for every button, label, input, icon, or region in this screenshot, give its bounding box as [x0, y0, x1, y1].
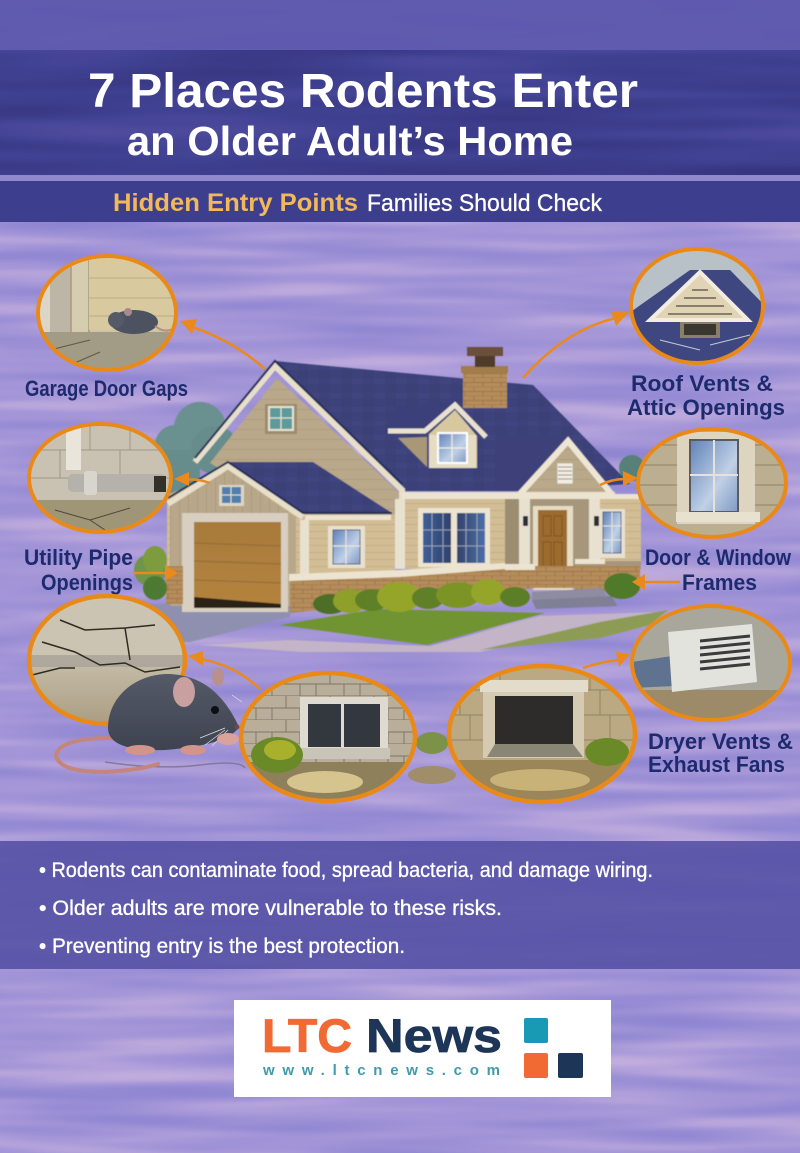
left brick base	[166, 566, 183, 604]
arrow: door label to house	[632, 574, 680, 590]
callout: door and window frames	[635, 425, 790, 540]
logo square orange	[524, 1053, 548, 1078]
dryer scene	[634, 608, 788, 718]
small window	[328, 526, 365, 568]
rat ear 2	[212, 668, 224, 686]
house illustration	[134, 347, 668, 652]
label: utility pipe openings: Utility Pipe	[24, 545, 133, 570]
bullet 1: • Rodents can contaminate food, spread bacteria, and damage wiring.	[39, 859, 653, 882]
subtitle band	[0, 175, 800, 222]
subtitle white text: Families Should Check	[367, 190, 603, 217]
callout: foundation vent opening	[445, 660, 640, 805]
arrow: to door and window	[600, 471, 638, 486]
callout: roof vents	[629, 247, 765, 365]
body left wall	[300, 520, 395, 580]
garage ring	[38, 256, 176, 370]
logo: LTC News	[234, 1000, 611, 1097]
bullet panel background	[0, 841, 800, 969]
subtitle gold text: Hidden Entry Points	[113, 189, 358, 217]
dryer ring	[632, 606, 790, 720]
callout: garage door gaps	[36, 254, 178, 372]
label: utility pipe openings	[24, 545, 133, 595]
main roof	[275, 361, 630, 491]
header panel: title	[0, 50, 800, 175]
logo wordmark News: News	[366, 1009, 502, 1062]
small rat	[108, 308, 175, 334]
window scene	[640, 431, 784, 535]
main gable wall	[210, 378, 402, 515]
roof scene	[633, 251, 761, 361]
title line 2: an Older Adult’s Home	[127, 118, 573, 164]
rat paws	[125, 733, 239, 755]
label: roof vents and attic openings: Roof Vents &	[631, 371, 773, 396]
label: door and window frames	[645, 545, 791, 595]
label: garage door gaps: Garage Door Gaps	[25, 376, 188, 401]
arrow: to utility pipe	[174, 472, 210, 486]
opening ring	[449, 666, 635, 802]
logo background	[234, 1000, 611, 1097]
callout: foundation cracks	[25, 590, 190, 730]
logo square teal	[524, 1018, 548, 1043]
gable window	[265, 404, 297, 434]
logo url: www.ltcnews.com	[262, 1062, 500, 1079]
panel: risk bullets	[0, 841, 800, 969]
callout: utility pipe openings	[25, 420, 175, 540]
main gable trim	[195, 366, 402, 501]
right lawn	[480, 610, 668, 650]
label: roof vents and attic openings	[627, 371, 785, 420]
porch area	[519, 499, 641, 569]
shrubs	[143, 546, 640, 614]
rat ground crack	[105, 762, 245, 768]
porch roof	[495, 435, 570, 491]
title banner background	[0, 50, 800, 175]
garage and lower walls	[167, 470, 640, 600]
right trim column	[300, 520, 309, 580]
subtitle background	[0, 181, 800, 222]
rat illustration	[56, 668, 245, 772]
garage gable window	[219, 485, 244, 506]
large window	[418, 508, 490, 567]
callout: dryer vents	[628, 602, 793, 724]
label: door and window frames: Frames	[682, 570, 757, 595]
right window	[600, 509, 625, 558]
label: dryer vents and exhaust fans	[648, 729, 793, 777]
rat eye	[211, 706, 219, 714]
pipe scene	[31, 426, 169, 530]
garage door	[182, 513, 288, 612]
crack ring	[29, 596, 185, 724]
basement ring	[241, 673, 415, 801]
rat nose and whiskers	[200, 695, 242, 746]
bullet 2: • Older adults are more vulnerable to these risks.	[39, 897, 502, 920]
logo square navy	[558, 1053, 583, 1078]
arrow: to foundation crack	[188, 651, 260, 689]
rat tail	[56, 738, 158, 772]
bullet 3: • Preventing entry is the best protection.	[39, 935, 405, 958]
arrow: to roof vent	[523, 311, 629, 378]
dormer	[385, 402, 486, 468]
driveway and walkways	[140, 604, 660, 652]
crack scene	[31, 598, 183, 722]
chimney	[461, 347, 508, 408]
wall lamps	[523, 516, 599, 526]
arrow: to dryer vent	[583, 652, 630, 668]
top band	[0, 0, 800, 50]
pipe ring	[29, 424, 171, 532]
logo wordmark LTC: LTC	[262, 1009, 352, 1062]
garage wall	[170, 470, 296, 606]
window ring	[638, 429, 786, 537]
opening scene	[451, 668, 633, 800]
upper body under roof	[402, 495, 640, 500]
trees behind house	[134, 402, 645, 586]
lawn	[280, 609, 545, 645]
front steps	[532, 588, 617, 609]
arrow: utility label to house	[134, 565, 178, 581]
label: roof vents and attic openings: Attic Openings	[627, 395, 785, 420]
roof ring	[631, 249, 763, 363]
main body column and wall	[395, 499, 519, 569]
main gable dark edge	[195, 361, 402, 484]
title line 1: 7 Places Rodents Enter	[88, 65, 638, 118]
rat body and head	[108, 674, 239, 750]
label: dryer vents and exhaust fans: Exhaust Fans	[648, 752, 785, 777]
garage roof	[168, 462, 392, 521]
subtitle separator	[0, 175, 800, 181]
arrows	[134, 311, 680, 689]
arrow: to garage door	[180, 319, 265, 369]
callout: basement window	[238, 670, 420, 805]
porch gable	[402, 441, 641, 499]
garage scene	[40, 258, 174, 368]
brick base	[289, 559, 640, 613]
label: dryer vents and exhaust fans: Dryer Vents &	[648, 729, 793, 754]
label: utility pipe openings: Openings	[41, 570, 133, 595]
front door	[533, 506, 573, 590]
ground and shrub between callouts	[408, 732, 456, 784]
basement scene	[243, 675, 413, 799]
rat ear 1	[173, 677, 195, 707]
